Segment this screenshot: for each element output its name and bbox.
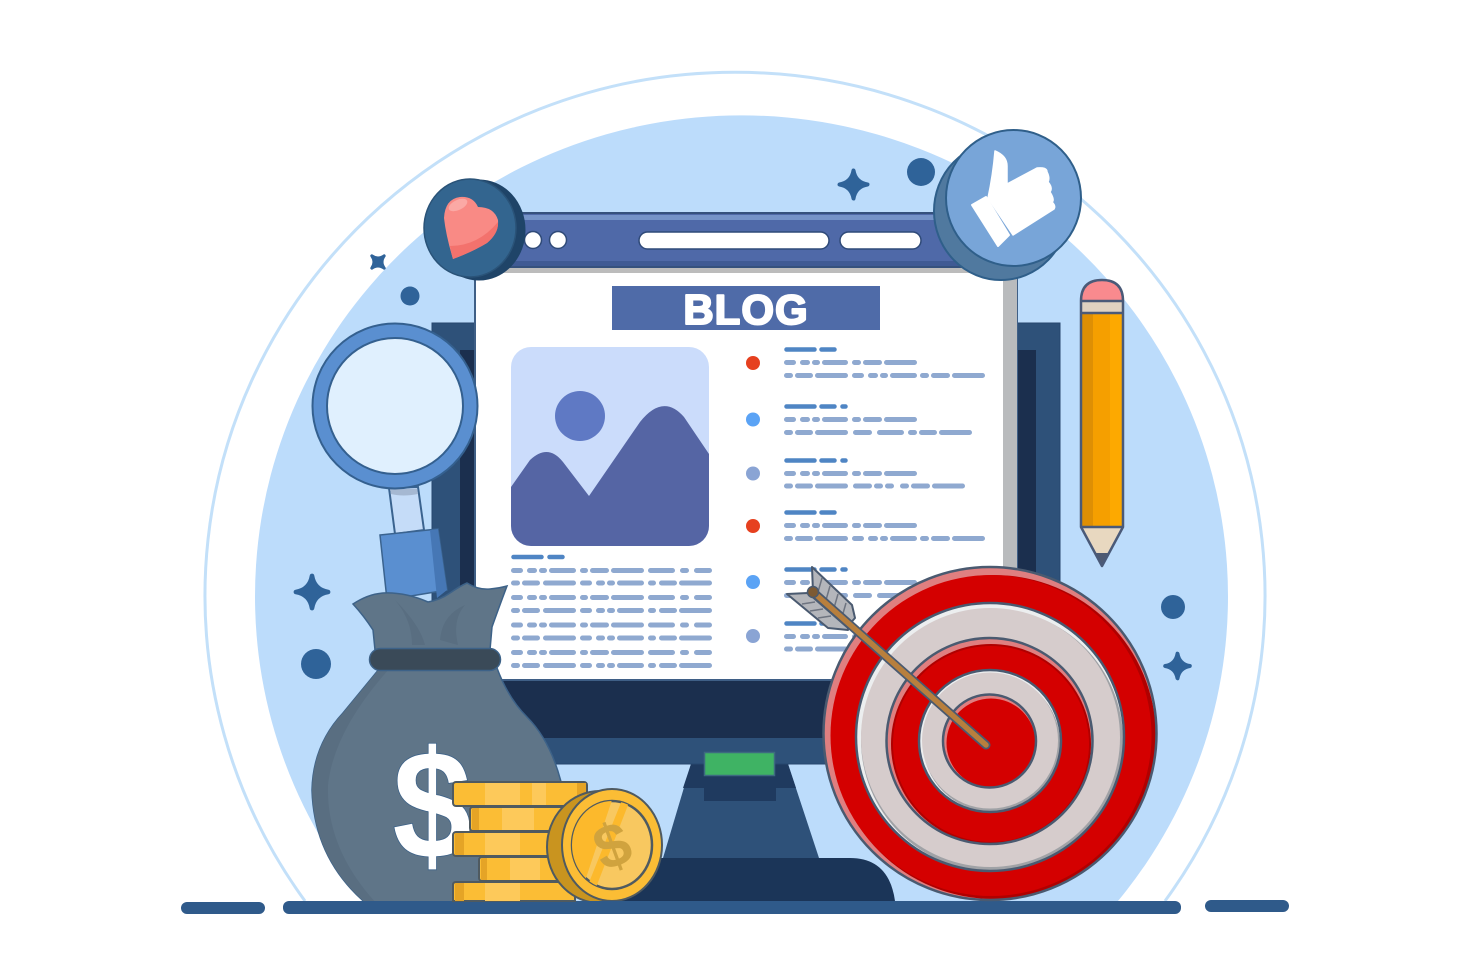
- icon: heart badge: [424, 179, 525, 280]
- blog heading: BLOG: [683, 286, 809, 333]
- list headings: [786, 350, 846, 624]
- bullseye: [943, 694, 1036, 788]
- power light: [704, 752, 774, 776]
- magnifier stem: [389, 487, 424, 534]
- coin 2: [470, 807, 580, 831]
- icon: magnifying glass: [312, 324, 478, 600]
- arrow shaft: [808, 586, 986, 745]
- title bar: [500, 213, 980, 267]
- background circles: [205, 72, 1265, 901]
- inner white ring: [919, 670, 1061, 812]
- blog heading: [612, 286, 880, 333]
- magnifier lens: [312, 324, 478, 488]
- browser window: [475, 213, 1017, 680]
- icon: pencil: [1081, 280, 1123, 566]
- dollar sign: $: [393, 720, 471, 891]
- monitor frame: [432, 323, 1060, 764]
- icon: large coin: $: [585, 808, 641, 885]
- left text block: [514, 557, 710, 666]
- bag fold marks: [395, 600, 465, 645]
- icon: large coin: [547, 789, 662, 903]
- coin 5: [453, 882, 575, 901]
- magnifier handle: [380, 529, 447, 600]
- coin 3: [453, 832, 563, 856]
- icon: thumbs up badge: [934, 130, 1081, 280]
- arrow feathers: [787, 567, 855, 630]
- coin 1: [453, 782, 587, 806]
- bag body: [312, 668, 565, 905]
- right list: [746, 350, 982, 649]
- bag top: [353, 583, 507, 650]
- window page: [475, 262, 1017, 680]
- icon: arrow: [787, 567, 986, 745]
- coin 4: [479, 857, 569, 881]
- list lines: [786, 362, 982, 649]
- ground lines: [181, 900, 1289, 914]
- icon: money bag: [312, 583, 565, 905]
- monitor stand: [600, 764, 895, 901]
- monitor: [432, 323, 1060, 901]
- icon: target: [824, 567, 1156, 900]
- bag tie: [370, 648, 500, 670]
- image placeholder: [511, 347, 709, 546]
- inner red ring: [886, 638, 1092, 844]
- coin stack: [453, 782, 587, 901]
- decorative sparkles and dots: [296, 158, 1190, 679]
- bullets: [746, 356, 760, 643]
- outer white ring: [856, 603, 1124, 871]
- outer red ring: [824, 567, 1156, 900]
- illustration: blog monetization: [181, 70, 1289, 914]
